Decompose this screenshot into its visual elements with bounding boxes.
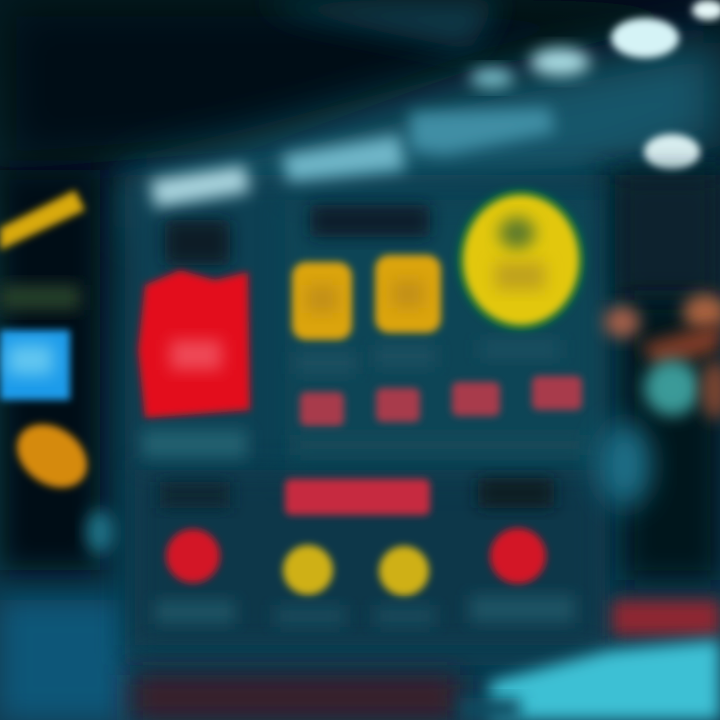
subheading dark: lower right (478, 478, 554, 508)
subheading dark: lower left (160, 482, 230, 508)
banner: red lower heading (285, 479, 430, 515)
icon: yellow circle badge (457, 189, 585, 331)
captions lower row (155, 595, 575, 627)
caption under red card (142, 430, 247, 458)
icon: yellow diagonal bar (0, 190, 85, 250)
icon: red circle left (166, 529, 220, 583)
captions under yellow cards (296, 340, 560, 374)
orange ball (5, 411, 99, 501)
subheading dark bar: column two (310, 205, 430, 237)
panel: left side screen (0, 170, 114, 570)
card: yellow left (292, 262, 352, 340)
bottom strip (130, 600, 720, 720)
blue screen (0, 330, 70, 400)
heading: board title (150, 108, 555, 208)
subheading dark bar: column one (165, 220, 230, 265)
card: yellow right (375, 255, 441, 333)
panel: main board (125, 175, 610, 665)
dim stripes (0, 285, 80, 310)
captions under red badges (295, 435, 585, 455)
card: red large shirt (138, 270, 250, 418)
icon: red circle right (490, 528, 546, 584)
right side figures (599, 175, 720, 580)
row of small red badges (300, 376, 582, 426)
icon: yellow circle right (379, 546, 429, 596)
icon: yellow circle left (283, 545, 333, 595)
ceiling lights (470, 0, 720, 170)
